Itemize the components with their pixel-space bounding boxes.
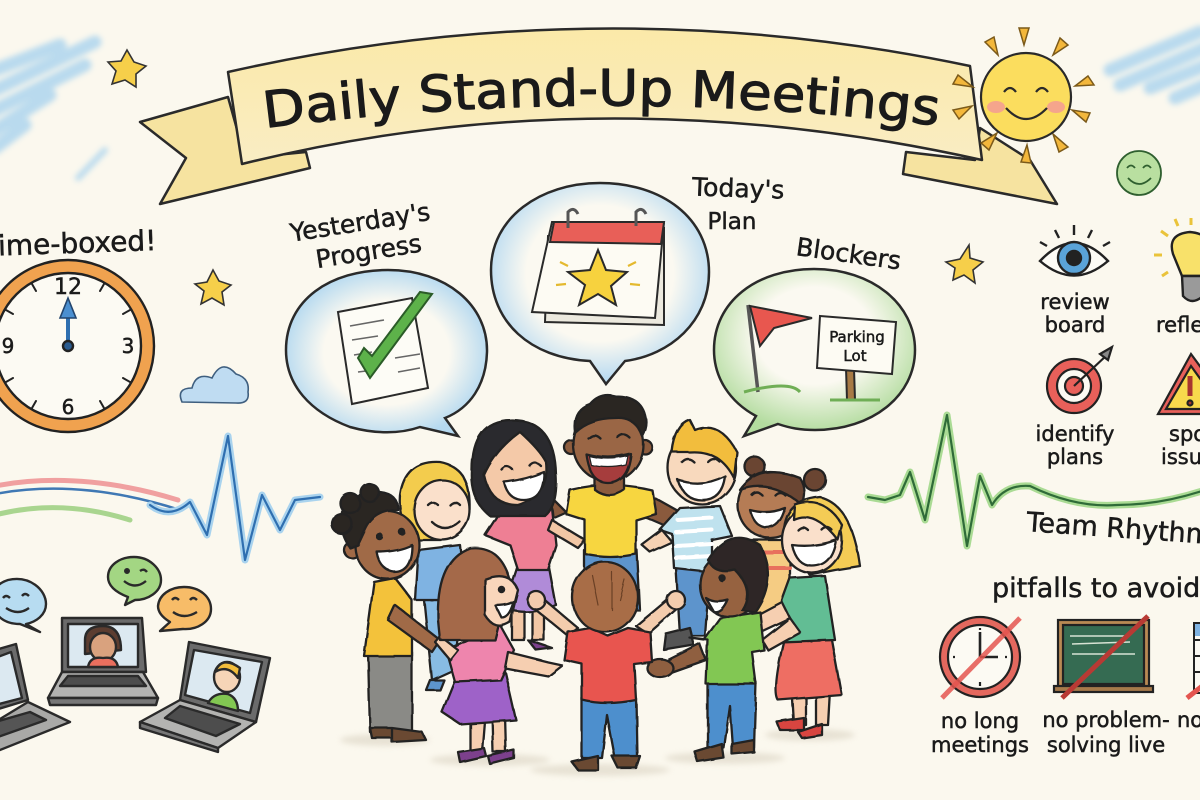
icon: parking lot sign: Lot — [843, 347, 867, 365]
icon: star top left — [108, 50, 146, 87]
icon: cloud — [180, 367, 248, 403]
icon: eye — [1040, 225, 1110, 276]
icon: clock: 9 — [2, 334, 14, 358]
speech bubble: blockers — [714, 269, 915, 436]
icon: parking lot sign — [817, 316, 896, 400]
icon: clock: 3 — [122, 334, 134, 358]
title — [265, 105, 942, 128]
icon: crossed out status sheet — [1187, 623, 1200, 698]
label: blockers: Blockers — [794, 232, 903, 276]
label: no problem-solving live — [1042, 708, 1170, 757]
speech bubble: yesterday — [286, 270, 487, 436]
icon: warning triangle — [1158, 354, 1200, 414]
laptop: left — [0, 644, 70, 752]
label: identify plans — [1036, 422, 1114, 469]
child: blond girl blue shirt — [400, 462, 470, 690]
label: identify plans: plans — [1047, 445, 1103, 469]
icon: clock — [0, 260, 154, 432]
icon: clock: 12 — [54, 275, 82, 300]
icon: red flag — [744, 305, 812, 392]
label: review board — [1040, 290, 1110, 337]
label: spot issues — [1161, 422, 1200, 469]
child: black hair girl pink shirt — [472, 420, 585, 650]
label: no long meetings — [931, 709, 1029, 757]
heading: pitfalls to avoid: pitfalls to avoid — [992, 573, 1200, 604]
laptop: centre — [48, 618, 158, 705]
icon: parking lot sign: Parking — [829, 328, 885, 346]
group of children — [332, 395, 860, 770]
child: curly hair boy yellow shirt — [332, 484, 440, 742]
label: review board: review — [1040, 290, 1110, 314]
left ribbon tail — [140, 97, 310, 204]
right pulse wave — [868, 415, 1200, 546]
chat bubble: blue — [0, 579, 46, 632]
label: yesterday's progress — [287, 197, 437, 277]
ribbon body — [228, 28, 982, 164]
icon: star near clock — [195, 270, 231, 305]
background blue scribbles — [0, 32, 1200, 178]
label: no long meetings: no long — [941, 709, 1019, 733]
icon: light bulb — [1154, 218, 1200, 301]
title banner: Daily Stand-Up Meetings — [265, 67, 938, 132]
chat bubble: green — [108, 557, 161, 605]
label: today's plan: Plan — [708, 209, 756, 235]
label: today's plan: Today's — [691, 172, 785, 205]
icon: calendar — [532, 209, 664, 325]
left pulse wave — [0, 436, 320, 560]
child: dark hair boy green shirt — [647, 538, 768, 762]
clock hand — [66, 304, 70, 346]
child: red shirt back of head — [527, 562, 685, 770]
speech bubble: today — [491, 183, 709, 384]
icon: target — [1047, 347, 1112, 413]
child: brown hair girl pink shirt — [435, 548, 562, 764]
icon: crossed out clock — [940, 617, 1020, 698]
label: today's plan — [691, 172, 785, 235]
ground shadow — [340, 729, 855, 776]
label: review board: board — [1045, 313, 1105, 337]
icon: checklist page — [338, 292, 432, 404]
label: no long meetings: meetings — [931, 733, 1029, 757]
label: no problem-solving live: solving live — [1047, 733, 1165, 757]
icon: star right — [946, 245, 983, 283]
child: yellow shirt centre back — [518, 395, 680, 610]
laptop: right — [140, 642, 270, 752]
child: blond girl green shirt — [748, 497, 860, 738]
right ribbon tail — [903, 128, 1057, 204]
child: blond boy striped shirt — [642, 420, 737, 650]
label: identify plans: identify — [1036, 422, 1114, 446]
label: yesterday's progress: Progress — [314, 229, 424, 274]
icon: green smiley — [1117, 151, 1161, 195]
title banner — [138, 27, 1058, 206]
child: bun hair girl — [738, 457, 826, 620]
icon: sun — [953, 28, 1094, 163]
label: yesterday's progress: Yesterday's — [287, 197, 432, 248]
video call laptops — [0, 557, 270, 752]
chat bubble: orange — [158, 587, 211, 631]
icon: clock: 6 — [62, 395, 74, 419]
icon: crossed out chalkboard — [1054, 616, 1153, 698]
label: no problem-solving live: no problem- — [1042, 708, 1170, 732]
